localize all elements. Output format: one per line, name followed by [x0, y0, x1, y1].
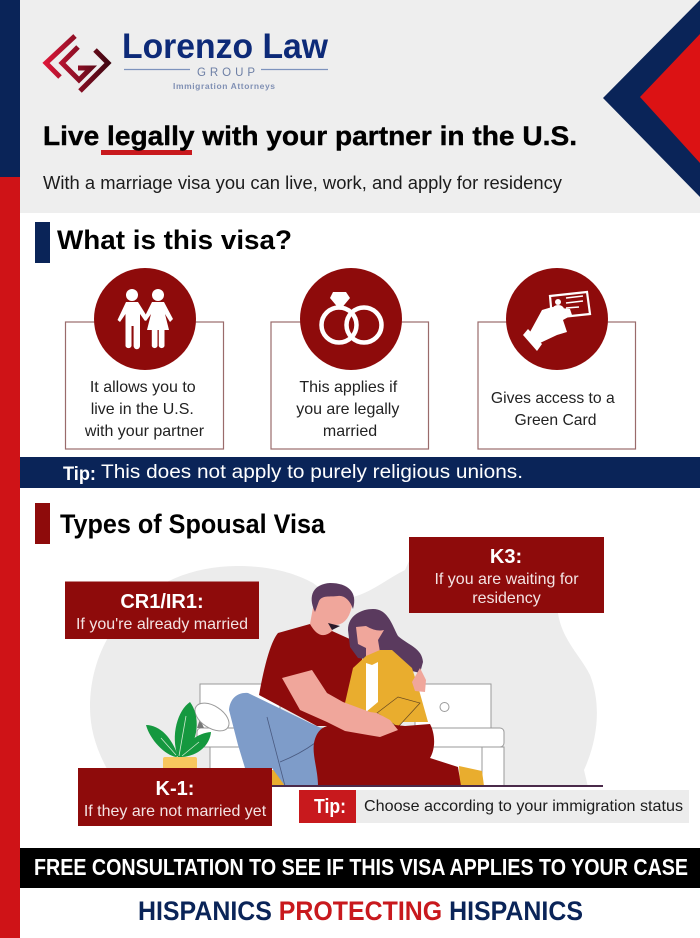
panel: card married	[271, 268, 428, 449]
plant	[146, 702, 211, 771]
slogan: HISPANICS PROTECTING HISPANICS	[138, 896, 583, 926]
card text: married	[323, 423, 377, 440]
callout: CR1/IR1: If you're already married	[76, 616, 248, 633]
icon: rings	[300, 268, 402, 370]
logo group label: GROUP	[197, 67, 255, 79]
callout: K3: residency	[472, 590, 541, 607]
card text: live in the U.S.	[91, 401, 194, 418]
woman's hair	[348, 609, 423, 673]
card text: with your partner	[84, 423, 205, 440]
woman's skirt	[314, 724, 461, 786]
man's jeans	[229, 693, 326, 786]
man's shirt	[259, 624, 362, 726]
woman's jacket	[345, 650, 428, 722]
callout: K-1: If they are not married yet	[84, 803, 267, 820]
tip bar: religious unions: This does not apply to purely religious unions.	[101, 462, 523, 483]
ground line	[272, 785, 603, 787]
heading: Types of Spousal Visa	[35, 503, 326, 544]
logo tagline: Immigration Attorneys	[173, 81, 275, 91]
left side stripe	[0, 0, 20, 938]
woman's shoe	[459, 766, 484, 786]
tip: immigration status: Choose according to your immigration status	[364, 798, 683, 815]
card text: Green Card	[515, 412, 596, 429]
woman's face	[356, 626, 384, 664]
callout: K-1	[78, 768, 272, 826]
woman's shirt	[366, 662, 378, 712]
tip bar: religious unions: Tip:	[63, 464, 96, 485]
decorative diamond	[603, 0, 700, 197]
logo wordmark: Lorenzo Law	[122, 27, 329, 66]
tip: immigration status	[299, 790, 689, 823]
card text: It allows you to	[90, 379, 196, 396]
card text: Gives access to a	[491, 390, 615, 407]
tip: immigration status: Tip:	[314, 796, 346, 818]
background blob	[90, 537, 597, 787]
banner: free consultation	[20, 848, 700, 888]
callout: CR1/IR1	[65, 582, 259, 639]
callout: K3: K3:	[490, 546, 522, 568]
title underline	[101, 150, 192, 155]
man's hand on shoulder	[412, 668, 426, 692]
icon: hand holding card	[506, 268, 608, 370]
logo: Lorenzo Law Group	[46, 27, 329, 91]
illustration: couple on sofa	[90, 537, 603, 787]
sofa	[190, 684, 504, 786]
panel: card partner	[66, 268, 224, 449]
man's head and neck	[310, 588, 353, 635]
logo rule	[124, 68, 328, 70]
man's shoe	[268, 770, 286, 786]
callout: K3: If you are waiting for	[434, 571, 579, 588]
callout: CR1/IR1: CR1/IR1:	[120, 591, 204, 613]
panel: card green card	[478, 268, 636, 449]
title: Live legally with your partner in the U.S.	[43, 121, 577, 151]
icon: logo mark	[46, 36, 108, 91]
panel: header background	[20, 0, 700, 213]
man's arm	[282, 670, 398, 737]
heading: What is this visa?: What is this visa?	[57, 225, 292, 255]
callout: K3	[409, 537, 604, 613]
callout: K-1: K-1:	[156, 778, 194, 800]
card text: This applies if	[299, 379, 398, 396]
woman's sleeve	[377, 697, 420, 727]
heading: What is this visa?	[35, 222, 292, 263]
card text: you are legally	[296, 401, 399, 418]
icon: couple	[94, 268, 196, 370]
tip bar: religious unions	[20, 457, 700, 488]
subtitle: With a marriage visa you can live, work, and apply for residency	[43, 173, 562, 193]
heading: Types of Spousal Visa: Types of Spousal Visa	[60, 509, 326, 539]
